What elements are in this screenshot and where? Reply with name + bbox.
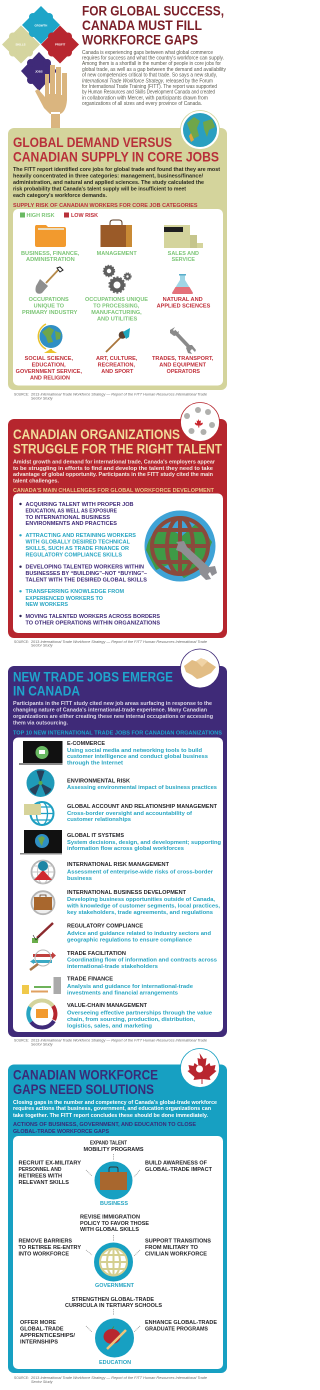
text block: take together. The FITT report concludes these should be done immediately. (13, 1113, 209, 1119)
subheading (13, 1122, 196, 1135)
category: natural and applied sciences: APPLIED SCIENCES (157, 304, 211, 310)
bullet: attracting and retaining: WITH GLOBALLY DESIRED TECHNICAL (26, 540, 131, 546)
action: support transitions: FROM MILITARY TO (145, 1245, 198, 1251)
category: social science (16, 356, 83, 382)
job: global account: GLOBAL ACCOUNT AND RELATIONSHIP MANAGEMENT (67, 804, 218, 810)
icon: laptop with cart (19, 741, 62, 765)
job: global IT systems: information flow across global workforces (67, 846, 184, 852)
bullet: transferring knowledge: NEW WORKERS (26, 602, 68, 608)
icon: maple leaf badge (180, 402, 220, 442)
action: build awareness (145, 1160, 213, 1173)
action: recruit ex-military: PERSONNEL AND (18, 1167, 62, 1173)
icon: value chain ring (28, 1000, 55, 1028)
bullet: moving talented workers: TO OTHER OPERATIONS WITHIN ORGANIZATIONS (26, 620, 160, 626)
text block: to be struggling in efforts to find and develop the talent they need to take (13, 466, 213, 472)
action: support transitions: SUPPORT TRANSITIONS (145, 1238, 211, 1244)
job: e-commerce: customer intelligence and conduct global business (67, 754, 208, 760)
job: value-chain management: chain, from sourcing, production, distribution, (67, 1017, 196, 1023)
action: strengthen curricula: STRENGTHEN GLOBAL-TRADE (72, 1297, 154, 1303)
source note: Sector Study (31, 1380, 53, 1384)
label: education: EDUCATION (99, 1360, 131, 1366)
category: primary industry (22, 297, 78, 316)
icon: sales and service (164, 225, 203, 248)
bullet: attracting and retaining (19, 533, 136, 558)
category: trades (152, 356, 214, 375)
job: trade finance: Analysis and guidance for international-trade (67, 984, 193, 990)
text block: Amidst growth and demand for international trade, Canada's employers appear (13, 460, 215, 466)
subheading: CANADA'S MAIN CHALLENGES FOR GLOBAL WORKFORCE DEVELOPMENT (13, 488, 215, 494)
category: natural and applied sciences: NATURAL AND (163, 297, 203, 303)
bullet: acquiring talent (19, 502, 134, 527)
job: environmental risk: ENVIRONMENTAL RISK (67, 778, 130, 784)
intro text block: Among them is a shortfall in the number of people in core jobs for (82, 61, 221, 67)
source note: SOURCE: (14, 392, 29, 396)
icon: puzzle pieces and hand: SKILLS (16, 42, 26, 46)
category: trades: OPERATORS (167, 369, 200, 375)
source note (14, 392, 207, 400)
panel: new trade jobs (8, 649, 227, 1037)
action: support transitions (145, 1238, 211, 1258)
job: international risk management: business (67, 876, 92, 882)
subheading: SUPPLY RISK OF CANADIAN WORKERS FOR CORE JOB CATEGORIES (13, 203, 198, 209)
source note: 2013 International Trade Workforce Strategy — Report of the FITT Human Resources International Trade (31, 640, 207, 644)
icon: shovel (36, 267, 63, 294)
heading (13, 669, 173, 699)
source note: 2013 International Trade Workforce Strategy — Report of the FITT Human Resources International Trade (31, 1376, 207, 1380)
category: management: MANAGEMENT (97, 251, 137, 257)
action: remove barriers: REMOVE BARRIERS (18, 1238, 72, 1244)
icon: maple leaf badge (180, 1048, 220, 1088)
source note: 2013 International Trade Workforce Strategy — Report of the FITT Human Resources International Trade (31, 392, 207, 396)
bullet: developing talented workers: DEVELOPING TALENTED WORKERS WITHIN (26, 564, 144, 570)
category: social science: EDUCATION, (32, 362, 66, 368)
category: processing, manufacturing, utilities (85, 297, 148, 322)
action: expand talent: MOBILITY PROGRAMS (84, 1147, 144, 1153)
category: primary industry: PRIMARY INDUSTRY (22, 310, 78, 316)
bullet: attracting and retaining: SKILLS, SUCH AS TRADE FINANCE OR (26, 546, 129, 552)
category: business, finance, administration: BUSINESS, FINANCE, (21, 251, 80, 257)
category: trades: AND EQUIPMENT (159, 362, 207, 368)
icon: pen and checkbox (32, 923, 53, 943)
heading: CANADIAN SUPPLY IN CORE JOBS (13, 150, 219, 164)
text block (13, 167, 220, 199)
text block: Closing gaps in the number and competency of Canada's global-trade workforce (13, 1100, 217, 1106)
intro text block: by Human Resources and Skills Development Canada and created (82, 90, 215, 96)
education group (20, 1297, 217, 1366)
icon: folder (35, 225, 66, 247)
intro text block: requires for success and what the country's workforce can supply. (82, 56, 224, 62)
bullet: acquiring talent: TO INTERNATIONAL BUSINESS (26, 515, 110, 521)
icon: business briefcase (86, 1154, 140, 1200)
action: support transitions: CIVILIAN WORKFORCE (145, 1252, 207, 1258)
icon: puzzle pieces and hand: PROFIT (55, 42, 66, 46)
source note: SOURCE: (14, 640, 29, 644)
job: trade facilitation (30, 950, 217, 970)
job: global IT systems: System decisions, design, and development; supporting (67, 840, 221, 846)
text block (13, 701, 213, 726)
icon: flask (172, 274, 193, 294)
job: regulatory compliance: Advice and guidance related to industry sectors and (67, 931, 211, 937)
job: global IT systems: GLOBAL IT SYSTEMS (67, 833, 124, 839)
heading: GAPS NEED SOLUTIONS (13, 1082, 154, 1097)
icon: wrench (170, 327, 196, 354)
category: social science: GOVERNMENT SERVICE, (16, 369, 83, 375)
job: international business development: with knowledge of customer segments, local practices, (66, 904, 221, 910)
text block: The FITT report identified core jobs for global trade and found that they are most (13, 167, 220, 173)
action: build awareness: BUILD AWARENESS OF (145, 1160, 208, 1166)
icon: puzzle pieces and hand (2, 6, 79, 128)
intro text block: for International Trade Training (FITT). The report was supported (82, 84, 217, 90)
intro text block: of new competencies critical to that trade. So says a new study, (82, 73, 217, 79)
bullet: attracting and retaining: REGULATORY COMPLIANCE SKILLS (26, 552, 122, 558)
text block: advantage of global opportunity. Participants in the FITT study cited the main (13, 472, 213, 478)
job: environmental risk (26, 769, 217, 797)
label: government: GOVERNMENT (95, 1283, 135, 1289)
category: sales and service (168, 251, 199, 263)
source note: Sector Study (31, 396, 53, 400)
bullet: developing talented workers: TALENT WITH THE DESIRED GLOBAL SKILLS (26, 578, 147, 584)
icon: hand and globe (24, 802, 54, 825)
heading (13, 427, 223, 456)
action: remove barriers: INTO WORKFORCE (18, 1252, 69, 1258)
bullet: developing talented workers: BUSINESSES BY “BUILDING”–NOT “BUYING”– (26, 571, 147, 577)
job: trade facilitation: TRADE FACILITATION (67, 951, 126, 957)
panel: organizations struggle for talent (8, 402, 227, 638)
job: regulatory compliance: geographic regulations to ensure compliance (67, 938, 192, 944)
bullet: attracting and retaining: ATTRACTING AND RETAINING WORKERS (26, 533, 136, 539)
category: natural and applied sciences (157, 297, 211, 310)
panel: global demand versus Canadian supply (8, 110, 227, 390)
action: revise immigration: REVISE IMMIGRATION (80, 1214, 140, 1220)
action: remove barriers (18, 1238, 81, 1258)
job: global IT systems (20, 830, 221, 854)
illustration: globe and wrench (144, 510, 217, 582)
icon: laptop with globe (20, 830, 62, 854)
category: art, culture: AND SPORT (101, 369, 134, 375)
action: expand talent: EXPAND TALENT (90, 1140, 128, 1146)
category: trades: TRADES, TRANSPORT, (152, 356, 214, 362)
job: international business development: Developing business opportunities outside of Canada, (67, 897, 216, 903)
source note (14, 640, 207, 648)
bullet: acquiring talent: ENVIRONMENTS AND PRACTICES (26, 521, 117, 527)
action: recruit ex-military (18, 1160, 81, 1186)
job: international risk management (32, 860, 213, 884)
icon: briefcase (100, 220, 132, 247)
source note: Sector Study (31, 1042, 53, 1046)
category: art, culture: RECREATION, (98, 362, 136, 368)
category: processing, manufacturing, utilities: MANUFACTURING, (91, 310, 142, 316)
heading: NEW TRADE JOBS EMERGE (13, 669, 173, 684)
text block: changing nature of Canada's international-trade experience. Many Canadian (13, 708, 207, 714)
heading (13, 135, 219, 164)
job: trade facilitation: international-trade stakeholders (67, 964, 158, 970)
action: strengthen curricula: CURRICULA IN TERTIARY SCHOOLS (65, 1303, 162, 1309)
job: trade finance (22, 976, 193, 996)
category: social science: AND RELIGION (30, 376, 70, 382)
job: global account: Cross-border oversight and accountability of (67, 811, 192, 817)
text block: heavily concentrated in three categories: management, business/finance/ (13, 174, 204, 180)
government group (18, 1214, 211, 1289)
intro text block: Canada is experiencing gaps between what global commerce (82, 50, 213, 56)
subheading: ACTIONS OF BUSINESS, GOVERNMENT, AND EDUCATION TO CLOSE (13, 1122, 196, 1128)
heading: CANADIAN ORGANIZATIONS (13, 427, 180, 442)
category: art, culture (96, 356, 138, 375)
action: build awareness: GLOBAL-TRADE IMPACT (145, 1167, 213, 1173)
icon: handshake badge (180, 649, 220, 688)
icon: paint brush (106, 328, 130, 352)
icon: risk globe (32, 860, 54, 884)
category: processing, manufacturing, utilities: AND UTILITIES (97, 316, 138, 322)
text block (13, 1100, 217, 1119)
icon: desk globe (38, 324, 62, 353)
job: trade facilitation: Coordinating flow of information and contracts across (67, 958, 217, 964)
source note (14, 1376, 207, 1384)
text block: each category's workforce demands. (13, 193, 108, 199)
intro text block: organizations of all sizes and every province of Canada. (82, 101, 202, 107)
title (82, 4, 224, 48)
bullet: developing talented workers (19, 564, 147, 584)
action: recruit ex-military: RECRUIT EX-MILITARY (18, 1160, 81, 1166)
job: trade finance: investments and financial arrangements (67, 990, 178, 996)
legend: HIGH RISK (26, 213, 55, 219)
action: offer apprenticeships (20, 1320, 76, 1346)
text block: requires actions that business, government, and education organizations can (13, 1106, 211, 1112)
job: e-commerce: E-COMMERCE (67, 741, 105, 747)
category: primary industry: OCCUPATIONS (29, 297, 69, 303)
icon: globe badge (180, 110, 220, 150)
category: processing, manufacturing, utilities: TO PROCESSING, (93, 304, 140, 310)
job: value-chain management: logistics, sales, and marketing (67, 1024, 152, 1030)
icon: currency exchange (22, 977, 61, 994)
action: revise immigration: WITH GLOBAL SKILLS (80, 1227, 139, 1233)
text block: talent challenges. (13, 478, 60, 484)
action: strengthen curricula (65, 1297, 162, 1309)
action: revise immigration (80, 1214, 149, 1233)
icon: puzzle pieces and hand: GROWTH (34, 24, 47, 28)
bullet: transferring knowledge: EXPERIENCED WORKERS TO (26, 596, 103, 602)
job: global account (24, 802, 218, 825)
job: international business development: key stakeholders, trade agreements, and regulations (67, 910, 213, 916)
action: enhance graduate programs: ENHANCE GLOBAL-TRADE (145, 1320, 217, 1326)
job: e-commerce (19, 741, 208, 766)
category: sales and service: SALES AND (168, 251, 199, 257)
bullet: moving talented workers (19, 614, 160, 626)
category: sales and service: SERVICE (172, 257, 195, 263)
label: business: BUSINESS (100, 1201, 128, 1207)
bullet: transferring knowledge: TRANSFERRING KNOWLEDGE FROM (26, 589, 125, 595)
icon: puzzle pieces and hand: JOBS (35, 70, 43, 74)
source note: SOURCE: (14, 1038, 29, 1042)
text block: them via outsourcing. (13, 720, 69, 726)
source note: 2013 International Trade Workforce Strategy — Report of the FITT Human Resources International Trade (31, 1038, 207, 1042)
text block: organizations are either creating these new internal occupations or accessing (13, 714, 213, 720)
subheading: GLOBAL-TRADE WORKFORCE GAPS (13, 1129, 109, 1135)
job: trade finance: TRADE FINANCE (67, 976, 113, 982)
text block: risk probability that Canada's talent supply will be insufficient to meet (13, 186, 186, 192)
job: e-commerce: through the Internet (67, 760, 123, 766)
job: regulatory compliance (32, 923, 211, 944)
text block (13, 460, 215, 484)
legend: LOW RISK (71, 213, 98, 219)
job: environmental risk: Assessing environmental impact of business practices (67, 785, 217, 791)
legend (20, 212, 98, 219)
action: enhance graduate programs (145, 1320, 217, 1332)
source note: Sector Study (31, 644, 53, 648)
category: art, culture: ART, CULTURE, (96, 356, 138, 362)
job: regulatory compliance: REGULATORY COMPLIANCE (67, 924, 143, 930)
icon: arrows and magnifier (30, 950, 56, 970)
intro text block: in collaboration with Mercer, with participants drawn from (82, 95, 209, 101)
icon: gears (103, 265, 131, 293)
heading: IN CANADA (13, 684, 80, 699)
bullet: acquiring talent: ACQUIRING TALENT WITH PROPER JOB (26, 502, 134, 508)
title: CANADA MUST FILL (82, 18, 202, 34)
source note: SOURCE: (14, 1376, 29, 1380)
job: value-chain management: Overseeing effective partnerships through the value (67, 1010, 212, 1016)
action: offer apprenticeships: APPRENTICESHIPS/ (20, 1333, 76, 1339)
job: value-chain management (28, 1000, 212, 1030)
category: processing, manufacturing, utilities: OCCUPATIONS UNIQUE (85, 297, 148, 303)
panel: workforce gaps need solutions (8, 1048, 227, 1373)
job: international business development (32, 890, 221, 916)
category: social science: SOCIAL SCIENCE, (25, 356, 74, 362)
job: e-commerce: Using social media and networking tools to build (67, 748, 202, 754)
heading (13, 1067, 158, 1097)
job: value-chain management: VALUE-CHAIN MANAGEMENT (67, 1003, 148, 1009)
bullet: acquiring talent: EDUCATION, AS WELL AS EXPOSURE (26, 508, 117, 514)
action: offer apprenticeships: GLOBAL-TRADE (20, 1326, 64, 1332)
action: expand talent (84, 1140, 144, 1153)
source note (14, 1038, 207, 1046)
category: business, finance, administration: ADMINISTRATION (26, 257, 75, 263)
icon: briefcase globe (32, 891, 54, 914)
action: remove barriers: TO RETIREE RE-ENTRY (18, 1245, 81, 1251)
action: offer apprenticeships: INTERNSHIPS (20, 1340, 58, 1346)
icon: government globe (86, 1235, 140, 1282)
job: international risk management: Assessment of enterprise-wide risks of cross-border (67, 870, 213, 876)
icon: radiation globe (26, 769, 54, 797)
intro text block: International Trade Workforce Strategy, released by the Forum (82, 78, 214, 84)
intro text block (82, 50, 226, 107)
action: recruit ex-military: RETIREES WITH (18, 1174, 62, 1180)
bullet: transferring knowledge (19, 589, 125, 608)
action: recruit ex-military: RELEVANT SKILLS (18, 1180, 69, 1186)
action: revise immigration: POLICY TO FAVOR THOSE (80, 1221, 149, 1227)
heading: GLOBAL DEMAND VERSUS (13, 135, 172, 150)
title: WORKFORCE GAPS (82, 32, 198, 48)
action: offer apprenticeships: OFFER MORE (20, 1320, 56, 1326)
action: enhance graduate programs: GRADUATE PROGRAMS (145, 1326, 208, 1332)
heading: CANADIAN WORKFORCE (13, 1067, 158, 1082)
text block: administration, and natural and applied sciences. The study calculated the (13, 180, 204, 186)
category: primary industry: UNIQUE TO (34, 304, 64, 310)
category: business, finance, administration (21, 251, 80, 263)
bullet: moving talented workers: MOVING TALENTED WORKERS ACROSS BORDERS (26, 614, 160, 620)
job: international risk management: INTERNATIONAL RISK MANAGEMENT (67, 862, 170, 868)
business group (18, 1140, 213, 1207)
job: international business development: INTERNATIONAL BUSINESS DEVELOPMENT (67, 890, 187, 896)
subheading: TOP 10 NEW INTERNATIONAL TRADE JOBS FOR CANADIAN ORGANIZATIONS (13, 730, 222, 736)
intro text block: global trade, as well as a gap between the demand and availability (82, 67, 226, 73)
icon: apple and pencil (86, 1309, 140, 1358)
text block: Participants in the FITT study cited new job areas surfacing in response to the (13, 701, 212, 707)
job: global account: customer relationships (67, 817, 131, 823)
